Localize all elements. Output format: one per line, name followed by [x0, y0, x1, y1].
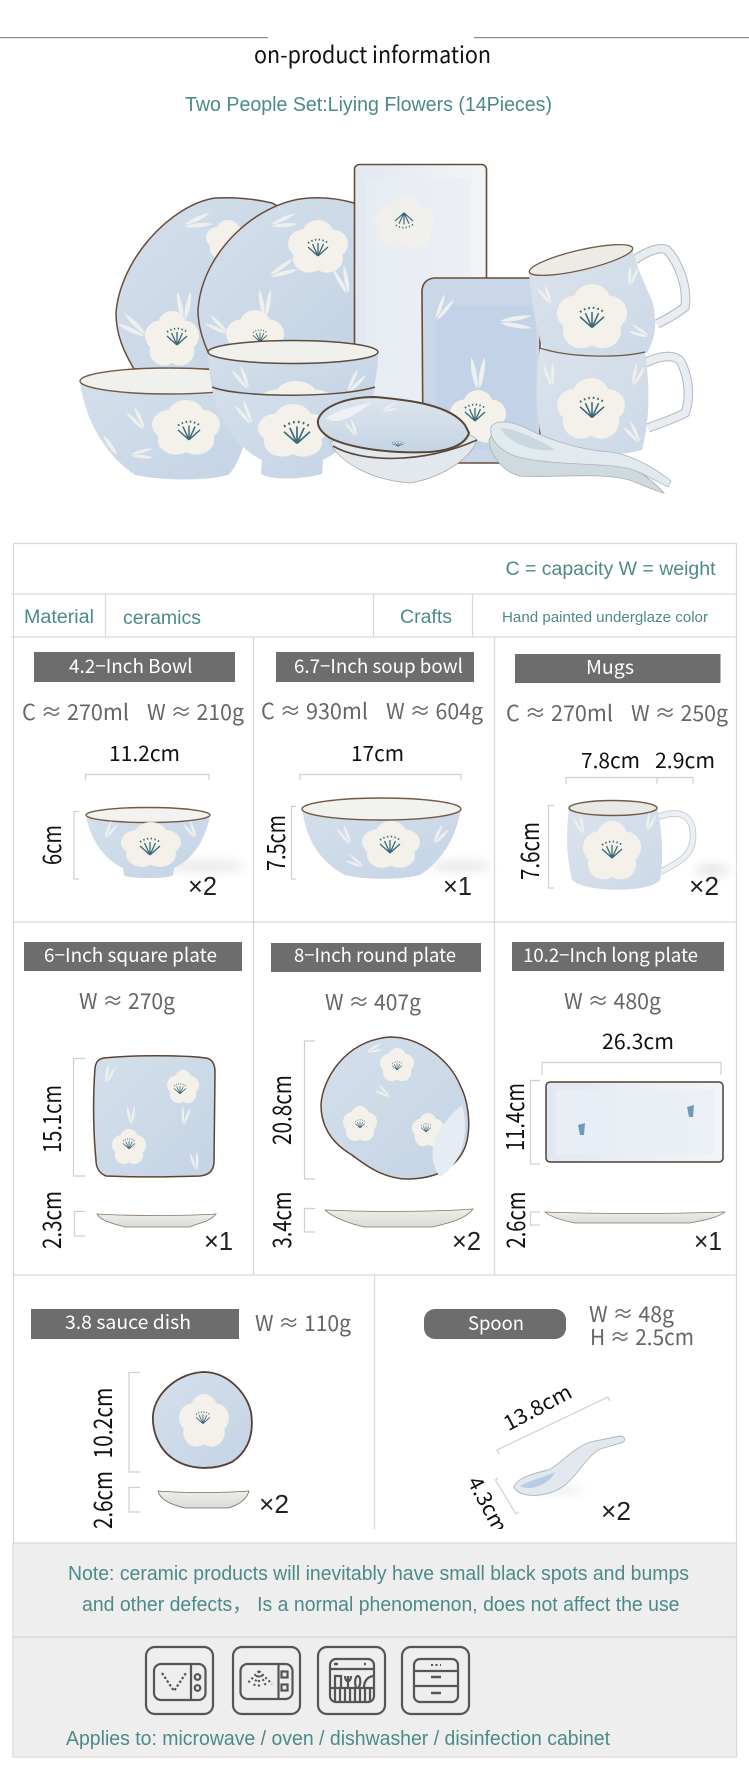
height side dimension	[497, 1192, 540, 1248]
long plate upright	[354, 164, 486, 462]
dish side photo	[158, 1491, 249, 1508]
height side dimension: 2.6cm	[84, 1471, 120, 1529]
name bar	[271, 941, 481, 972]
height dimension: 11.4cm	[496, 1083, 532, 1151]
name bar: 10.2−Inch long plate	[523, 941, 698, 968]
height: H ≈ 2.5cm	[590, 1320, 694, 1352]
sauce dish lower	[330, 429, 477, 483]
height dimension	[263, 1041, 315, 1179]
material value: ceramics	[123, 608, 201, 629]
name bar: 8−Inch round plate	[294, 941, 456, 968]
sauce dish upper	[318, 397, 469, 452]
quantity: ×2	[259, 1489, 289, 1519]
hero photo: 14-piece tableware set	[80, 164, 688, 493]
panel: 6-inch square plate	[24, 941, 242, 1256]
square plate photo	[94, 1056, 215, 1177]
dish top photo	[153, 1372, 252, 1468]
panel: note and applicable appliances	[12, 1543, 737, 1757]
weight: W ≈ 48g	[589, 1297, 675, 1329]
round plate front	[198, 198, 360, 363]
height side dimension	[263, 1192, 315, 1248]
width dimension	[86, 738, 209, 780]
name bar	[34, 652, 235, 682]
quantity: ×1	[694, 1226, 722, 1256]
subtitle: Two People Set:Liying Flowers (14Pieces)	[185, 94, 552, 116]
mug photo	[567, 800, 730, 890]
icon: dishwasher	[318, 1647, 385, 1714]
capacity: C ≈ 270ml	[22, 695, 129, 727]
spoon photo	[514, 1436, 625, 1495]
icon: oven	[233, 1647, 300, 1714]
panel: 3.8 sauce dish	[31, 1306, 352, 1529]
quantity: ×2	[188, 871, 217, 901]
quantity: ×1	[443, 871, 472, 901]
plate side photo	[545, 1212, 725, 1223]
name pill	[424, 1309, 566, 1339]
height side dimension: 2.6cm	[497, 1192, 533, 1248]
top rule left	[0, 37, 268, 38]
icon: disinfection cabinet	[402, 1647, 469, 1714]
panel: 8-inch round plate	[263, 941, 481, 1256]
mug lower	[537, 348, 688, 455]
height dimension: 10.2cm	[84, 1388, 120, 1458]
height dimension	[33, 812, 79, 879]
height side dimension	[33, 1191, 85, 1249]
bowl width dimension: 4.3cm	[461, 1471, 515, 1538]
panel: 6.7-inch soup bowl	[257, 652, 492, 901]
quantity: ×1	[204, 1226, 233, 1256]
quantity: ×2	[452, 1226, 481, 1256]
quantity: ×2	[601, 1496, 631, 1526]
name bar: 4.2−Inch Bowl	[69, 652, 192, 679]
height side dimension	[94, 1472, 140, 1528]
small bowl upper	[208, 340, 378, 428]
top rule right	[474, 37, 749, 38]
width dimension: 17cm	[351, 738, 404, 768]
soup bowl photo	[302, 798, 492, 879]
quantity: ×2	[689, 871, 719, 901]
note text line 1: Note: ceramic products will inevitably have small black spots and bumps	[68, 1563, 689, 1585]
square plate	[422, 278, 540, 463]
weight: W ≈ 480g	[564, 984, 662, 1016]
width dimensions	[566, 745, 715, 784]
bowl photo	[86, 808, 247, 878]
height dimension: 7.6cm	[511, 822, 547, 880]
height side dimension: 3.4cm	[263, 1192, 299, 1248]
weight: W ≈ 250g	[631, 696, 729, 728]
height dimension: 15.1cm	[33, 1085, 69, 1153]
weight: W ≈ 210g	[147, 695, 245, 727]
material label: Material	[24, 607, 94, 628]
legend: capacity and weight: C = capacity W = weight	[506, 559, 716, 580]
capacity: C ≈ 270ml	[506, 696, 613, 728]
weight: W ≈ 270g	[79, 984, 176, 1016]
panel: mugs	[506, 653, 730, 901]
plate side photo	[97, 1214, 216, 1227]
weight: W ≈ 604g	[386, 694, 484, 726]
height dimension	[94, 1372, 140, 1473]
spec table frame	[11, 544, 737, 1757]
capacity: C ≈ 930ml	[261, 694, 368, 726]
weight: W ≈ 407g	[325, 985, 422, 1017]
width dimension: 26.3cm	[602, 1026, 674, 1056]
round plate back	[116, 198, 285, 369]
crafts label: Crafts	[400, 607, 452, 628]
crafts value: Hand painted underglaze color	[502, 609, 708, 626]
panel: 10.2-inch long plate	[496, 941, 725, 1256]
name bar: 3.8 sauce dish	[65, 1308, 191, 1335]
name pill: Spoon	[468, 1309, 524, 1336]
spoons	[489, 422, 671, 493]
height dimension: 6cm	[33, 825, 69, 865]
panel: 4.2-inch bowl	[22, 652, 247, 901]
height dimension: 20.8cm	[263, 1075, 299, 1145]
width dimension: 11.2cm	[109, 738, 180, 768]
name bar: 6−Inch square plate	[44, 941, 217, 968]
width dimensions: 7.8cm	[581, 745, 640, 775]
name bar: 6.7−Inch soup bowl	[294, 652, 463, 679]
icon: microwave	[146, 1647, 213, 1714]
panel: spoon	[424, 1297, 694, 1538]
mug upper	[527, 238, 686, 356]
long plate photo	[546, 1082, 723, 1162]
small bowl lower	[212, 387, 375, 478]
height side dimension: 2.3cm	[33, 1191, 69, 1249]
length dimension: 13.8cm	[498, 1376, 577, 1438]
large bowl	[80, 368, 258, 480]
width dimension	[300, 738, 461, 780]
height dimension	[496, 1080, 540, 1164]
width dimensions: 2.9cm	[655, 745, 715, 775]
name bar: Mugs	[586, 653, 634, 680]
bowl width dimension	[470, 1478, 520, 1529]
height dimension: 7.5cm	[257, 815, 293, 871]
height dimension	[33, 1058, 85, 1176]
weight: W ≈ 110g	[255, 1306, 352, 1338]
round plate photo	[321, 1037, 469, 1179]
name bar	[31, 1308, 239, 1339]
plate side photo	[325, 1209, 473, 1227]
length dimension	[496, 1388, 610, 1454]
name bar	[515, 653, 720, 683]
title: on-product information	[254, 36, 491, 70]
applies-to text: Applies to: microwave / oven / dishwasher / disinfection cabinet	[66, 1728, 610, 1750]
width dimension	[542, 1026, 721, 1075]
note text line 2: and other defects， Is a normal phenomenon, does not affect the use	[82, 1594, 680, 1616]
